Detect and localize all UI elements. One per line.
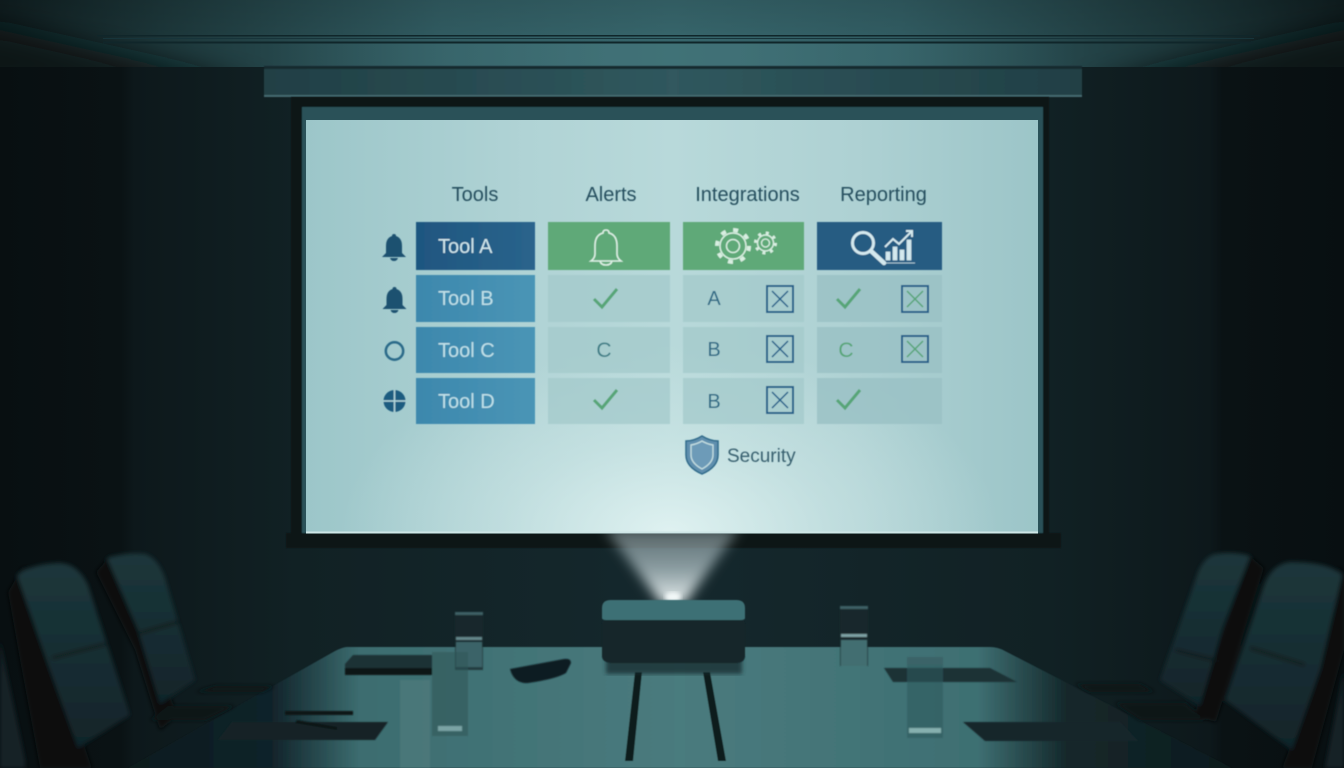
alerts column: C [596,339,612,362]
icon: gears [717,230,776,262]
notebook lower right [963,722,1138,741]
projection screen [286,96,1061,548]
icon: check [837,289,860,307]
chair frames [8,568,92,768]
chair back [17,563,130,748]
icon: shield [686,436,718,474]
icon: x box [767,387,793,413]
chair back [1160,553,1250,706]
icon: green x box [902,286,928,312]
chairs left [0,554,275,768]
tool column: Tool C [438,340,495,362]
notebook lower left [218,711,388,740]
reporting column: C [838,339,854,362]
icon: check [594,289,617,307]
tool column: Tool D [438,391,495,413]
conference table [128,647,1232,768]
screen surface [306,120,1038,534]
column headers: Alerts [585,184,637,206]
chair back [107,554,195,704]
remote control [510,659,571,683]
partial chair [0,640,25,768]
ceiling [0,0,1344,67]
integrations column: B [707,339,721,361]
integrations column: A [707,288,721,310]
alerts column [548,222,670,424]
icon: x box [767,336,793,362]
tool column: Tool B [438,288,494,310]
icon: bell [382,287,406,313]
projector [602,600,745,674]
tool column [416,222,535,424]
glass: front left [400,680,430,768]
screen housing [264,66,1082,97]
glass: back left [455,612,483,670]
glass: mid left [432,652,468,736]
icon: ring [386,342,403,360]
icon: quartered circle [384,390,406,412]
column headers: Integrations [695,184,800,206]
comparison table [382,184,942,474]
chairs right [1075,553,1344,768]
projector light cone [604,528,740,604]
notebook right [884,668,1017,682]
integrations column: B [707,391,721,413]
icon: outline bell [591,230,621,265]
column headers: Reporting [840,184,927,206]
column headers [452,184,927,206]
security label [686,436,796,474]
row marker icons [382,234,406,412]
icon: magnifier and chart [852,231,915,263]
chair back [1225,562,1342,750]
reporting column [817,222,942,424]
icon: check [837,390,860,408]
integrations column [683,222,804,424]
icon: bell [382,234,406,261]
items on table [218,606,1138,768]
icon: check [594,390,617,408]
column headers: Tools [452,184,498,206]
screen frame [286,97,1061,548]
glass: front right [907,657,943,738]
icon: green x box [902,336,928,362]
notebook left [345,655,432,675]
icon: x box [767,286,793,312]
tool column: Tool A [438,236,493,258]
table center stripes [625,672,726,761]
security label: Security [727,446,796,467]
glass: back right [840,606,868,666]
